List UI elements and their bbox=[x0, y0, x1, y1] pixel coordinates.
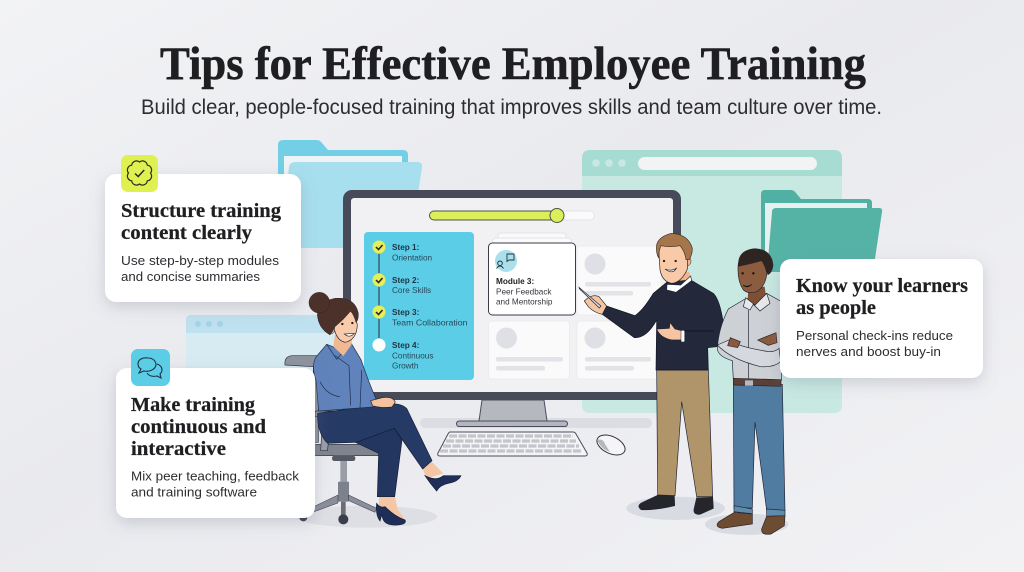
card: continuous training: interactive bbox=[131, 438, 226, 460]
panel: training steps: Step 4: bbox=[392, 341, 419, 350]
desk shadow bbox=[420, 418, 652, 428]
card: structure training: and concise summaries bbox=[121, 269, 261, 284]
panel: training steps: Continuous bbox=[392, 352, 433, 360]
panel: training steps: Step 3: bbox=[392, 308, 419, 317]
brown shoes bbox=[717, 512, 785, 534]
card: continuous training: and training software bbox=[131, 484, 257, 500]
panel: training steps: Step 1: bbox=[392, 243, 419, 252]
neck and collar bbox=[748, 287, 766, 305]
panel: training steps: Team Collaboration bbox=[392, 318, 468, 328]
bun bbox=[309, 292, 330, 313]
module 3 card: Module 3: bbox=[496, 277, 534, 286]
panel: training steps: Core Skills bbox=[392, 286, 431, 295]
light blue browser window bbox=[186, 315, 356, 423]
card: know your learners: Know your learners bbox=[796, 275, 968, 297]
hair bbox=[738, 248, 773, 275]
module 3 card: and Mentorship bbox=[496, 298, 553, 306]
khaki trousers bbox=[657, 370, 713, 497]
card: know your learners: nerves and boost buy-in bbox=[796, 344, 941, 359]
placeholder card bottom left bbox=[488, 321, 570, 379]
monitor bbox=[343, 190, 681, 400]
hand bbox=[371, 397, 395, 407]
jeans bbox=[733, 384, 785, 510]
presenter man in black sweater bbox=[579, 233, 725, 520]
card: continuous training: Mix peer teaching, feedback bbox=[131, 468, 300, 484]
woman seated in chair bbox=[285, 292, 461, 528]
module 3 card: Peer Feedback bbox=[496, 288, 552, 296]
ear bbox=[684, 256, 691, 266]
panel: training steps: Orientation bbox=[392, 254, 432, 262]
hair bbox=[656, 233, 692, 260]
shoes bbox=[639, 495, 713, 514]
jean cuffs bbox=[734, 506, 785, 516]
mouse bbox=[594, 431, 628, 459]
card: continuous training: Make training bbox=[131, 394, 255, 416]
card: structure training: Structure training bbox=[121, 200, 281, 222]
subtitle: Build clear, people-focused training that improves skills and team culture over time. bbox=[141, 96, 882, 119]
module 3 card bbox=[488, 233, 576, 315]
keyboard bbox=[438, 432, 587, 456]
shirt collar bbox=[667, 276, 692, 292]
title: Tips for Effective Employee Training bbox=[160, 38, 866, 90]
floor shadow bbox=[296, 506, 437, 528]
icon: speech bubbles bbox=[131, 349, 170, 386]
card: know your learners: as people bbox=[796, 297, 876, 319]
panel: training steps: Growth bbox=[392, 362, 419, 370]
panel: training steps bbox=[364, 232, 474, 380]
eyes and smile bbox=[743, 270, 753, 277]
teal browser window bbox=[582, 150, 842, 413]
office chair bbox=[285, 356, 381, 524]
card: continuous training bbox=[116, 349, 315, 518]
belt bbox=[733, 378, 781, 386]
monitor stand bbox=[456, 400, 568, 426]
placeholder card top right bbox=[577, 246, 661, 315]
neck bbox=[668, 272, 691, 293]
floor shadow bbox=[705, 514, 788, 535]
front leg and shoe bbox=[318, 404, 461, 491]
card: structure training bbox=[105, 155, 301, 302]
pointing hand and pen bbox=[579, 287, 607, 314]
back leg and shoe bbox=[354, 427, 405, 525]
shirt bbox=[717, 293, 782, 380]
colleague man with crossed arms bbox=[705, 248, 788, 535]
face bbox=[658, 243, 688, 283]
blue blouse bbox=[313, 343, 378, 411]
sweater bbox=[602, 280, 723, 370]
face bbox=[738, 260, 767, 293]
neck and face bbox=[333, 333, 352, 356]
blue folder illustration bbox=[278, 140, 422, 248]
card: structure training: content clearly bbox=[121, 222, 252, 244]
hair bbox=[317, 298, 358, 335]
eyes and smile bbox=[664, 257, 676, 264]
card: continuous training: continuous and bbox=[131, 416, 266, 438]
placeholder card bottom right bbox=[577, 321, 661, 379]
card: know your learners bbox=[780, 259, 983, 378]
card: know your learners: Personal check-ins reduce bbox=[796, 328, 953, 343]
chest hand bbox=[657, 322, 683, 340]
eyes and smile bbox=[342, 319, 352, 327]
icon: verified badge bbox=[121, 155, 158, 192]
panel: training steps: Step 2: bbox=[392, 276, 419, 285]
teal folder bbox=[761, 190, 882, 272]
progress bar bbox=[430, 208, 594, 222]
floor shadow bbox=[626, 497, 725, 520]
crossed forearms bbox=[717, 340, 781, 367]
card: structure training: Use step-by-step modules bbox=[121, 253, 280, 268]
